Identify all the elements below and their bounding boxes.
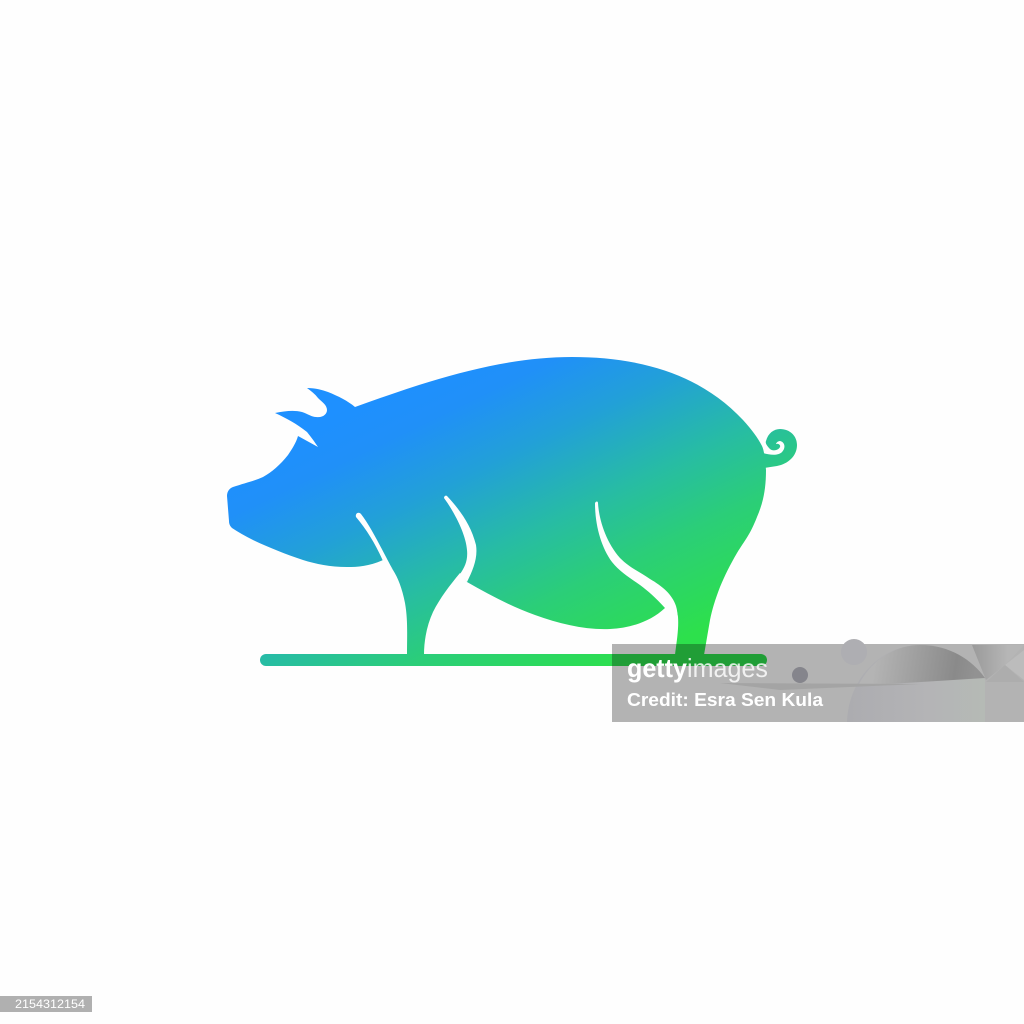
pig silhouette bbox=[227, 357, 766, 655]
gettyimages logotype: gettyimages bbox=[627, 653, 768, 683]
image id tag bbox=[0, 996, 92, 1012]
pig illustration bbox=[227, 357, 797, 666]
front shoulder slit bbox=[356, 513, 393, 570]
watermark band bbox=[612, 639, 1024, 722]
curly tail bbox=[763, 429, 797, 468]
belly-to-front-leg slit bbox=[444, 496, 476, 582]
ground line bbox=[260, 654, 767, 666]
image id tag: 2154312154 bbox=[15, 999, 86, 1011]
watermark background bbox=[612, 644, 1024, 722]
haunch slit bbox=[595, 502, 678, 650]
watermark texture shapes bbox=[720, 639, 1024, 722]
photographer credit: Credit: Esra Sen Kula bbox=[627, 690, 824, 710]
watermark dot bbox=[792, 667, 808, 683]
